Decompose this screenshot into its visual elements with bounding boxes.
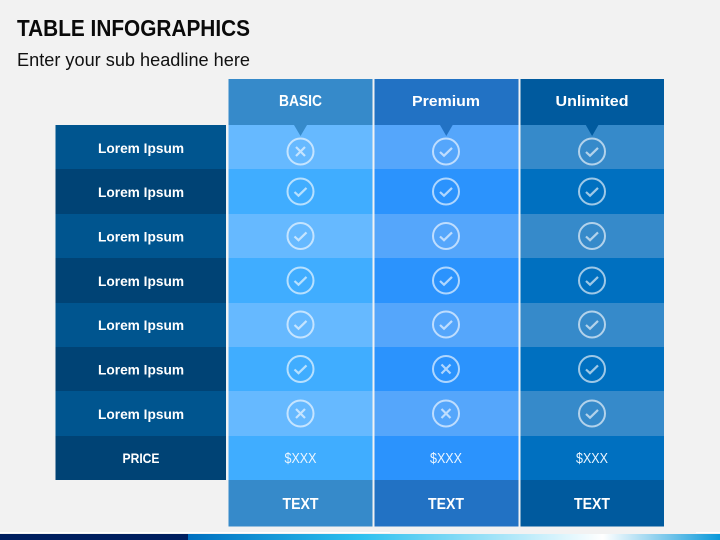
panel: Unlimited column bbox=[520, 79, 664, 526]
panel: BASIC column: TEXT bbox=[282, 496, 319, 513]
panel: Premium column: $XXX bbox=[430, 451, 462, 467]
panel: row labels: Lorem Ipsum bbox=[98, 140, 184, 156]
panel: BASIC column: BASIC bbox=[279, 93, 322, 110]
panel: BASIC column bbox=[228, 79, 372, 526]
panel: Unlimited column: $XXX bbox=[576, 451, 608, 467]
panel: row labels: Lorem Ipsum bbox=[98, 273, 184, 289]
subtitle: Enter your sub headline here bbox=[17, 50, 250, 70]
panel: row labels: Lorem Ipsum bbox=[98, 317, 184, 333]
panel: row labels: Lorem Ipsum bbox=[98, 184, 184, 200]
panel: Unlimited column: Unlimited bbox=[556, 93, 628, 110]
panel: row labels: Lorem Ipsum bbox=[98, 406, 184, 422]
panel: Unlimited column: TEXT bbox=[574, 496, 610, 513]
footer bar bbox=[0, 532, 720, 540]
panel: row labels: Lorem Ipsum bbox=[98, 362, 184, 378]
panel: row labels: PRICE bbox=[122, 450, 160, 466]
panel: Premium column bbox=[374, 79, 518, 526]
panel: row labels: Lorem Ipsum bbox=[98, 228, 184, 244]
title: TABLE INFOGRAPHICS bbox=[17, 15, 250, 41]
panel: Premium column: Premium bbox=[412, 93, 480, 110]
panel: BASIC column: $XXX bbox=[284, 451, 317, 467]
panel: Premium column: TEXT bbox=[428, 496, 464, 513]
panel: row labels bbox=[56, 125, 226, 480]
